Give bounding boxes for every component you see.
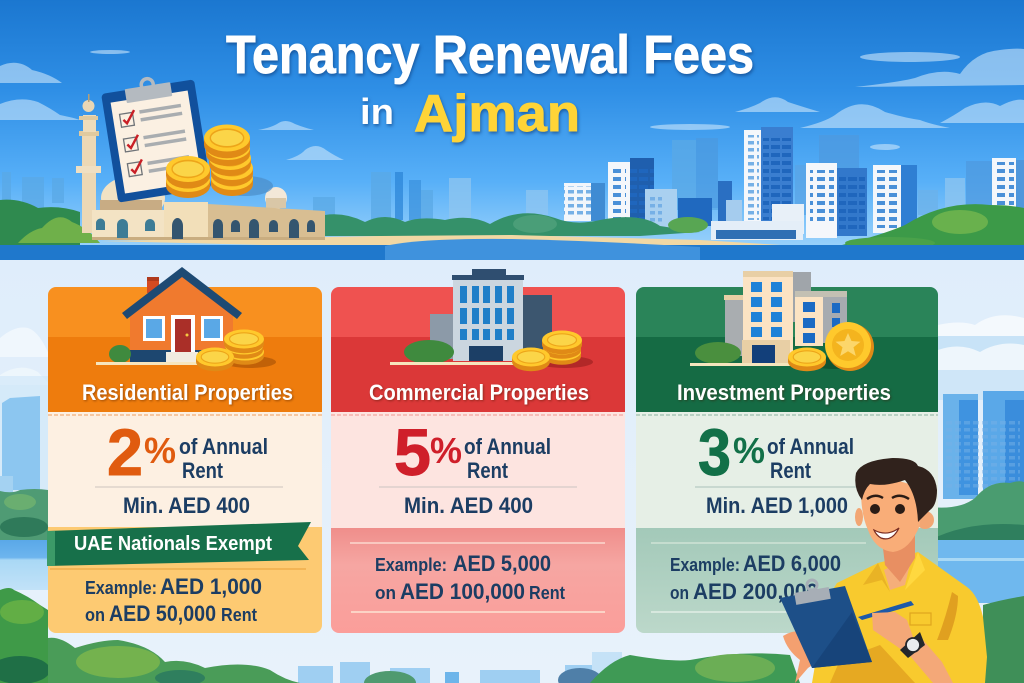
trees along the shore [0,200,1024,249]
title [226,25,754,143]
ribbon: UAE nationals exempt: UAE Nationals Exempt [74,533,272,555]
clouds in sky [0,49,1024,160]
fee rate: % [144,430,176,471]
clipboard [780,580,872,668]
example text: AED 5,000 [453,551,551,576]
example text: Example: [670,555,740,575]
distant skyline [2,135,992,223]
fee rate: Rent [770,458,812,483]
right forearm [905,640,953,683]
panel: residential properties [47,267,322,633]
right skyline buildings [564,127,1024,240]
icon: house with coins [96,267,276,371]
icon: apartment buildings with star coin [690,271,874,371]
fee rate [107,415,268,489]
icon: gold coin stacks [166,124,273,198]
fee rate: of Annual [464,434,551,459]
example text: AED 1,000 [160,574,262,599]
card background [48,287,322,633]
example text [670,551,841,604]
example text: on [85,605,105,625]
example text [375,551,565,604]
heading: Investment Properties [677,380,891,405]
ribbon: UAE nationals exempt [47,522,311,566]
character: man with clipboard [780,458,987,683]
icon: office building with coins [390,269,593,371]
minimum fee: Min. AED 1,000 [706,493,848,518]
example text: AED 50,000 [109,601,216,626]
title: Ajman [414,85,580,143]
card background [636,287,938,633]
panel: commercial properties [331,269,625,633]
example text: Example: [85,578,157,598]
example text: Rent [529,583,565,603]
pen [858,601,914,620]
hand right [872,612,913,650]
fee rate [698,415,854,489]
title: Tenancy Renewal Fees [226,25,754,85]
shirt shading and collar [830,552,958,683]
card background [331,287,625,633]
example text: AED 200,000 [693,579,818,604]
hair [855,458,937,522]
fee rate: of Annual [767,434,854,459]
example text: AED 6,000 [743,551,841,576]
fee rate: Rent [467,458,509,483]
left hand behind clipboard [783,631,820,683]
icon: clipboard with checklist [100,71,211,203]
icon: mosque [76,94,325,240]
bottom treeline and distant city [48,638,800,683]
example text [85,574,262,626]
header sky background [0,0,1024,260]
minimum fee: Min. AED 400 [404,493,533,518]
fee rate [394,415,551,489]
fee rate: % [733,430,765,471]
shirt [812,552,987,683]
fee rate: of Annual [179,434,268,459]
example text: on [670,583,689,603]
fee rate: Rent [182,458,224,483]
heading: Residential Properties [82,380,293,405]
panel: investment properties [636,271,938,633]
ears and neck [855,508,934,582]
example text: on [375,583,396,603]
right background scene [920,315,1024,683]
fee rate: 2 [107,415,143,489]
title: in [360,91,394,132]
example text: Rent [221,605,257,625]
lower section background [0,260,1024,683]
fee rate: 5 [394,415,431,489]
face [861,480,922,552]
fee rate: 3 [698,415,731,489]
heading: Commercial Properties [369,380,589,405]
example text: AED 100,000 [400,579,525,604]
beach and water [0,235,1024,260]
wrist watch [900,632,925,658]
minimum fee: Min. AED 400 [123,493,250,518]
fee rate: % [430,430,462,471]
example text: Example: [375,555,447,575]
eyes and smile [867,496,909,539]
left background scene [0,327,50,683]
